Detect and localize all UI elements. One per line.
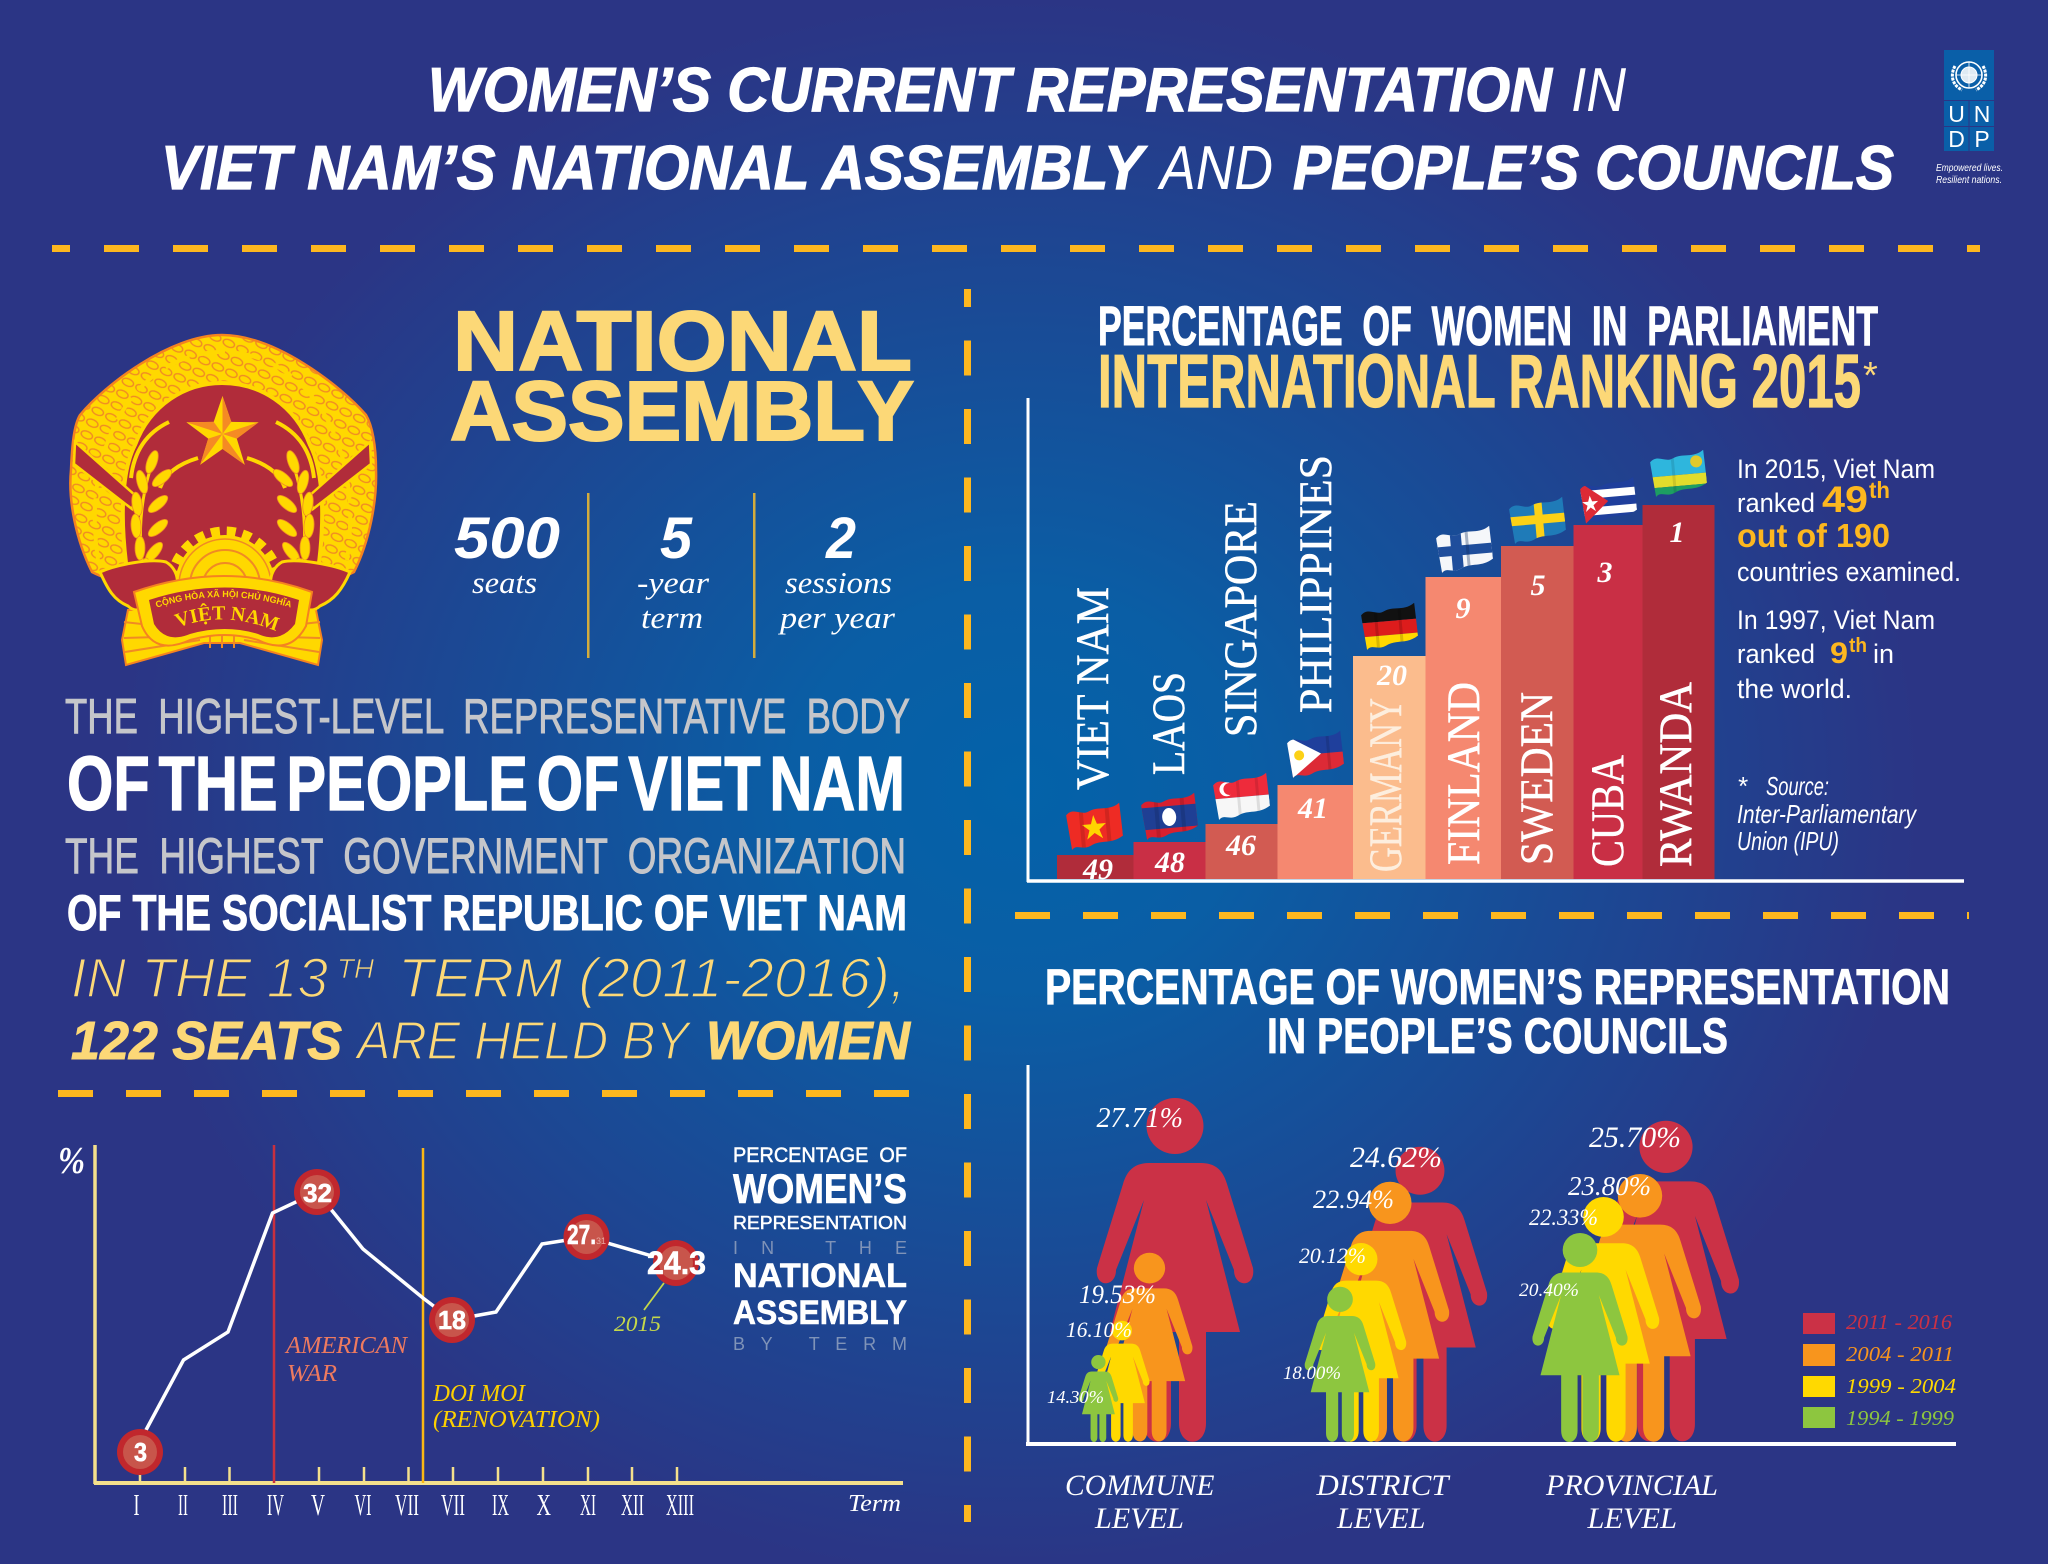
stat: 5-year term: term <box>641 600 703 635</box>
level labels: LEVEL <box>1094 1502 1184 1535</box>
stat: 2 sessions per year: 2 <box>825 506 856 571</box>
percentage labels: 20.40% <box>1519 1280 1579 1301</box>
bar chart: international ranking: GERMANY <box>1360 698 1412 872</box>
stat: 500 seats: 500 <box>454 506 560 571</box>
bar chart: international ranking: CUBA <box>1582 755 1634 867</box>
icon: flag of Finland <box>1436 526 1493 573</box>
bar chart: international ranking: 20 <box>1376 659 1407 692</box>
annotation: Doi Moi <box>432 1381 600 1433</box>
text block: Viet Nam ranking: th <box>1849 635 1867 657</box>
UNDP logo <box>1936 50 2003 186</box>
data point: term I, 3 <box>117 1429 163 1475</box>
percentage labels: 27.71% <box>1096 1102 1183 1134</box>
x-axis term labels: VI <box>354 1487 372 1522</box>
data point: term XI, 27.31: 31 <box>596 1236 606 1246</box>
annotation: Doi Moi: DOI MOI <box>432 1381 526 1407</box>
bar chart: international ranking: 9 <box>1456 592 1470 625</box>
icon: flag of Singapore <box>1213 772 1270 820</box>
source note <box>1737 771 1918 856</box>
percentage labels: 23.80% <box>1568 1171 1651 1201</box>
chart title: percentage of women's representation by term: ASSEMBLY <box>733 1294 907 1332</box>
icon: flag of the Philippines <box>1287 731 1344 778</box>
chart title: percentage of women's representation by term: B Y T E R M <box>733 1334 907 1354</box>
bar chart: international ranking: 49 <box>1082 853 1113 886</box>
bar chart: international ranking: VIET NAM <box>1067 587 1119 790</box>
heading: people's councils: IN PEOPLE’S COUNCILS <box>1267 1008 1728 1064</box>
bar chart: international ranking: FINLAND <box>1438 682 1490 865</box>
percentage labels: 20.12% <box>1299 1243 1366 1268</box>
percentage labels: 22.33% <box>1529 1205 1598 1230</box>
UNDP logo: U <box>1948 101 1965 127</box>
text block: description: OF THE SOCIALIST REPUBLIC OF VIET NAM <box>67 885 907 941</box>
x-axis term labels: III <box>222 1487 238 1522</box>
bar chart: international ranking: RWANDA <box>1650 682 1702 867</box>
x-axis term labels: VII <box>441 1487 465 1522</box>
text block: Viet Nam ranking <box>1737 454 1961 704</box>
annotation: American War <box>284 1333 409 1387</box>
heading: national assembly: ASSEMBLY <box>450 364 914 458</box>
icon: Viet Nam national emblem <box>69 334 378 666</box>
line chart: women's percentage by term <box>58 1140 903 1522</box>
source note: * <box>1737 771 1748 801</box>
heading: national assembly: NATIONAL <box>453 294 912 388</box>
chart title: percentage of women's representation by term <box>733 1144 907 1354</box>
text block: description: IN THE 13 <box>71 946 328 1009</box>
level labels <box>1065 1469 1718 1535</box>
icon: flag of Sweden <box>1509 497 1566 544</box>
stat: 5-year term <box>637 506 710 635</box>
x-axis term labels: XIII <box>666 1487 694 1522</box>
x-axis term labels: I <box>134 1487 140 1522</box>
level labels: DISTRICT <box>1315 1469 1451 1502</box>
bar chart: international ranking: SINGAPORE <box>1215 501 1267 737</box>
percentage labels: 16.10% <box>1066 1317 1132 1342</box>
UNDP logo: N <box>1974 101 1990 127</box>
text block: Viet Nam ranking: the world. <box>1737 674 1852 704</box>
line chart: women's percentage by term: % <box>58 1140 85 1182</box>
legend: 2011 - 2016 <box>1846 1310 1953 1334</box>
UNDP logo: Empowered lives. <box>1936 163 2003 174</box>
data point: term VIII, 18 <box>429 1297 475 1343</box>
legend: 2004 - 2011 <box>1846 1342 1954 1366</box>
text block: description: WOMEN <box>706 1011 911 1071</box>
title <box>161 56 1894 203</box>
percentage labels: 24.62% <box>1350 1141 1442 1174</box>
legend: 1999 - 2004 <box>1846 1374 1957 1398</box>
text block: description: ARE HELD BY <box>354 1011 693 1071</box>
legend: 1994 - 1999 <box>1846 1406 1955 1430</box>
text block: Viet Nam ranking: out of 190 <box>1737 517 1890 554</box>
bar chart: international ranking <box>1027 398 1964 886</box>
title: WOMEN’S CURRENT REPRESENTATION <box>428 56 1553 125</box>
data point: term V, 32: 32 <box>303 1178 332 1208</box>
x-axis term labels: V <box>311 1487 325 1522</box>
level labels: LEVEL <box>1586 1502 1677 1535</box>
percentage labels: 18.00% <box>1283 1363 1341 1384</box>
stat: 500 seats <box>454 506 560 600</box>
stat: 2 sessions per year <box>778 506 896 635</box>
provincial level figures <box>1532 1121 1739 1442</box>
bar chart: international ranking: 1 <box>1670 516 1684 549</box>
percentage labels: 14.30% <box>1047 1387 1104 1407</box>
title: PEOPLE’S COUNCILS <box>1293 134 1894 203</box>
district level figures <box>1305 1147 1487 1442</box>
icon: flag of Cuba <box>1580 477 1637 524</box>
bar chart: international ranking: 46 <box>1225 829 1256 862</box>
data point: term V, 32 <box>294 1169 340 1215</box>
chart title: percentage of women's representation by term: REPRESENTATION <box>733 1213 907 1233</box>
percentage labels: 22.94% <box>1313 1185 1394 1214</box>
x-axis term labels: XII <box>621 1487 644 1522</box>
chart title: percentage of women's representation by term: I N T H E <box>733 1238 907 1258</box>
stat: 500 seats: seats <box>472 565 537 600</box>
annotation: Doi Moi: (RENOVATION) <box>433 1407 600 1433</box>
bar chart: international ranking: 3 <box>1596 556 1612 589</box>
text block: Viet Nam ranking: In 1997, Viet Nam <box>1737 605 1935 635</box>
title: VIET NAM’S NATIONAL ASSEMBLY <box>161 134 1148 203</box>
bar chart: international ranking: 5 <box>1530 569 1546 602</box>
icon: Viet Nam national emblem: CỘNG HÒA XÃ HỘI CHỦ NGHĨA <box>156 589 290 608</box>
bar chart: international ranking: 41 <box>1297 792 1328 825</box>
x-axis term labels: X <box>536 1487 551 1522</box>
chart title: percentage of women's representation by term: NATIONAL <box>733 1257 907 1295</box>
text block: Viet Nam ranking: countries examined. <box>1737 557 1961 587</box>
text block: description: 122 SEATS <box>71 1011 342 1071</box>
text block: description: TH <box>337 953 375 984</box>
bar chart: international ranking: LAOS <box>1143 672 1195 775</box>
percentage labels: 19.53% <box>1079 1280 1156 1309</box>
UNDP logo: P <box>1974 126 1990 152</box>
level labels: COMMUNE <box>1065 1469 1214 1502</box>
annotation: American War: WAR <box>287 1361 337 1387</box>
source note: Source: <box>1766 771 1829 801</box>
legend <box>1803 1310 1957 1430</box>
panel: national assembly <box>65 294 914 1071</box>
x-axis term labels: IX <box>492 1487 509 1522</box>
text block: description <box>65 690 911 1071</box>
x-axis term labels: II <box>178 1487 188 1522</box>
UNDP logo: Resilient nations. <box>1936 175 2002 186</box>
line chart: women's percentage by term: Term <box>848 1491 901 1517</box>
heading: national assembly <box>450 294 914 458</box>
text block: Viet Nam ranking: 49 <box>1822 479 1868 520</box>
data point: term I, 3: 3 <box>134 1437 147 1467</box>
icon: flag of Viet Nam <box>1066 802 1123 850</box>
x-axis term labels: IV <box>267 1487 284 1522</box>
text block: description: OF THE PEOPLE OF VIET NAM <box>67 741 905 827</box>
text block: Viet Nam ranking: In 2015, Viet Nam <box>1737 454 1935 484</box>
text block: Viet Nam ranking: ranked <box>1737 488 1815 518</box>
text block: Viet Nam ranking: 9 <box>1830 637 1848 670</box>
x-axis term labels <box>134 1487 694 1522</box>
bar chart: international ranking: PHILIPPINES <box>1290 455 1342 713</box>
stat: 2 sessions per year: sessions <box>785 565 892 600</box>
chart title: percentage of women's representation by term: PERCENTAGE OF <box>733 1144 907 1167</box>
annotation: American War: AMERICAN <box>284 1333 409 1359</box>
x-axis term labels: XI <box>580 1487 596 1522</box>
icon: flag of Rwanda <box>1650 450 1707 497</box>
text block: description: THE HIGHEST GOVERNMENT ORGANIZATION <box>65 828 906 884</box>
stat: 2 sessions per year: per year <box>778 600 896 635</box>
level labels: LEVEL <box>1336 1502 1426 1535</box>
bar chart: international ranking: 48 <box>1154 846 1185 879</box>
text block: Viet Nam ranking: in <box>1873 639 1894 669</box>
annotation: 2015 <box>614 1283 664 1336</box>
title: IN <box>1571 56 1626 125</box>
level labels: PROVINCIAL <box>1545 1469 1718 1502</box>
data point: term VIII, 18: 18 <box>438 1305 466 1335</box>
stat: 5-year term: 5 <box>660 506 693 571</box>
annotation: 2015: 2015 <box>614 1311 661 1336</box>
data point: term XI, 27.31 <box>564 1214 610 1260</box>
title: AND <box>1157 134 1273 203</box>
data point: term XIII, 24.3: 24.3 <box>647 1245 706 1281</box>
icon: flag of Laos <box>1141 792 1198 840</box>
data point: term XI, 27.31: 27. <box>567 1219 596 1250</box>
source note: Union (IPU) <box>1737 826 1839 856</box>
percentage labels <box>1047 1102 1681 1407</box>
bar chart: international ranking: SWEDEN <box>1511 692 1563 865</box>
icon: Viet Nam national emblem: VIỆT NAM <box>174 603 280 631</box>
x-axis term labels: VII <box>395 1487 419 1522</box>
commune level figures <box>1079 1098 1253 1442</box>
heading: international ranking: * <box>1863 355 1878 397</box>
heading: international ranking <box>1098 294 1878 423</box>
percentage labels: 25.70% <box>1589 1121 1681 1154</box>
heading: people's councils <box>1045 959 1950 1064</box>
source note: Inter-Parliamentary <box>1737 799 1918 829</box>
text block: description: THE HIGHEST-LEVEL REPRESENTATIVE BODY <box>65 690 910 744</box>
text block: Viet Nam ranking: ranked <box>1737 639 1815 669</box>
stat: 5-year term: -year <box>637 565 710 600</box>
text block: description: TERM (2011-2016), <box>398 946 906 1009</box>
text block: Viet Nam ranking: th <box>1869 477 1890 503</box>
icon: flag of Germany <box>1361 603 1418 650</box>
chart title: percentage of women's representation by term: WOMEN’S <box>733 1165 907 1212</box>
chart: people's councils pictograms <box>1026 1065 1956 1535</box>
UNDP logo: D <box>1948 126 1965 152</box>
